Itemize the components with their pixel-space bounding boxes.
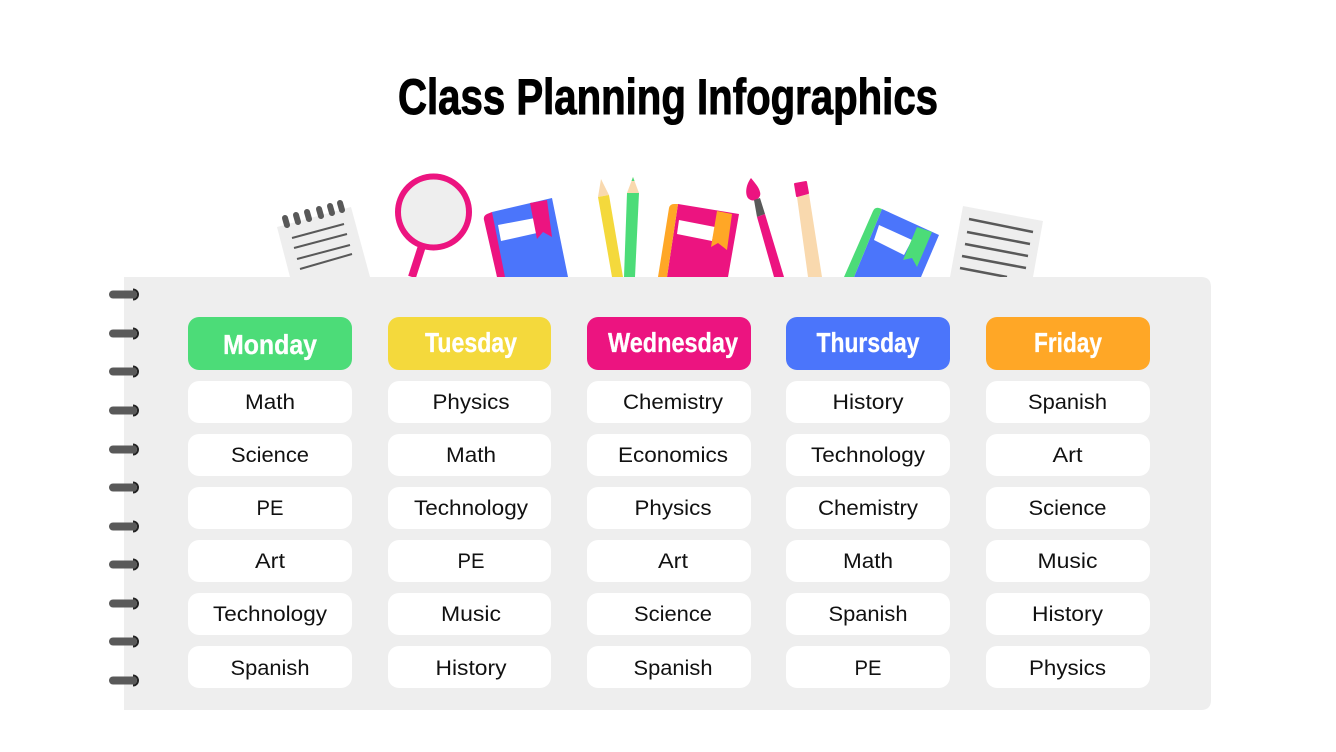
column: Thursday: Chemistry xyxy=(818,496,918,520)
column: Monday: Technology xyxy=(213,602,327,626)
icon: yellow pencil xyxy=(598,179,623,277)
icon: notepad xyxy=(277,203,370,277)
icon: green pencil xyxy=(624,177,639,277)
column: Wednesday: Physics xyxy=(634,496,712,520)
column: Tuesday xyxy=(388,317,551,688)
icon: green and blue book xyxy=(844,208,939,277)
column: Thursday xyxy=(786,317,950,688)
column: Friday: Art xyxy=(1052,443,1083,467)
column: Wednesday xyxy=(587,317,751,688)
column: Tuesday: Math xyxy=(446,443,496,467)
icon: paintbrush xyxy=(746,178,784,277)
column: Monday: Monday xyxy=(223,329,317,360)
column: Friday: Friday xyxy=(1034,327,1102,358)
icon: magnifying glass xyxy=(398,176,469,277)
column: Monday: Science xyxy=(231,443,309,467)
column: Thursday: PE xyxy=(854,656,882,680)
column: Monday xyxy=(188,317,352,688)
column: Monday: Art xyxy=(255,549,285,573)
column: Thursday: History xyxy=(832,390,904,414)
column: Friday: Music xyxy=(1038,549,1098,573)
icon: eraser pencil xyxy=(795,182,822,277)
column: Tuesday: Physics xyxy=(432,390,510,414)
icon: blue book xyxy=(484,198,568,277)
column: Thursday: Math xyxy=(843,549,893,573)
column: Friday: Spanish xyxy=(1028,390,1107,414)
notebook spiral rings xyxy=(109,288,139,686)
column: Friday: History xyxy=(1032,602,1103,626)
column: Wednesday: Wednesday xyxy=(608,327,738,358)
column: Tuesday: Music xyxy=(441,602,501,626)
column: Tuesday: PE xyxy=(458,549,484,573)
column: Wednesday: Spanish xyxy=(634,656,712,680)
column: Friday: Science xyxy=(1028,496,1106,520)
column: Tuesday: Technology xyxy=(414,496,528,520)
column: Monday: Spanish xyxy=(230,656,310,680)
column: Thursday: Technology xyxy=(811,443,925,467)
column: Friday: Physics xyxy=(1029,656,1106,680)
column: Wednesday: Economics xyxy=(618,443,728,467)
column: Wednesday: Art xyxy=(658,549,688,573)
title: Class Planning Infographics xyxy=(398,69,938,125)
column: Thursday: Spanish xyxy=(828,602,908,626)
panel: notebook page xyxy=(124,277,1211,710)
column: Friday xyxy=(986,317,1150,688)
column: Wednesday: Chemistry xyxy=(623,390,723,414)
column: Thursday: Thursday xyxy=(816,327,920,358)
column: Monday: Math xyxy=(245,390,295,414)
column: Wednesday: Science xyxy=(634,602,712,626)
icon: pink book xyxy=(658,204,739,277)
column: Tuesday: Tuesday xyxy=(425,327,517,358)
icon: paper sheet xyxy=(950,206,1043,277)
column: Tuesday: History xyxy=(436,656,507,680)
column: Monday: PE xyxy=(256,496,284,520)
